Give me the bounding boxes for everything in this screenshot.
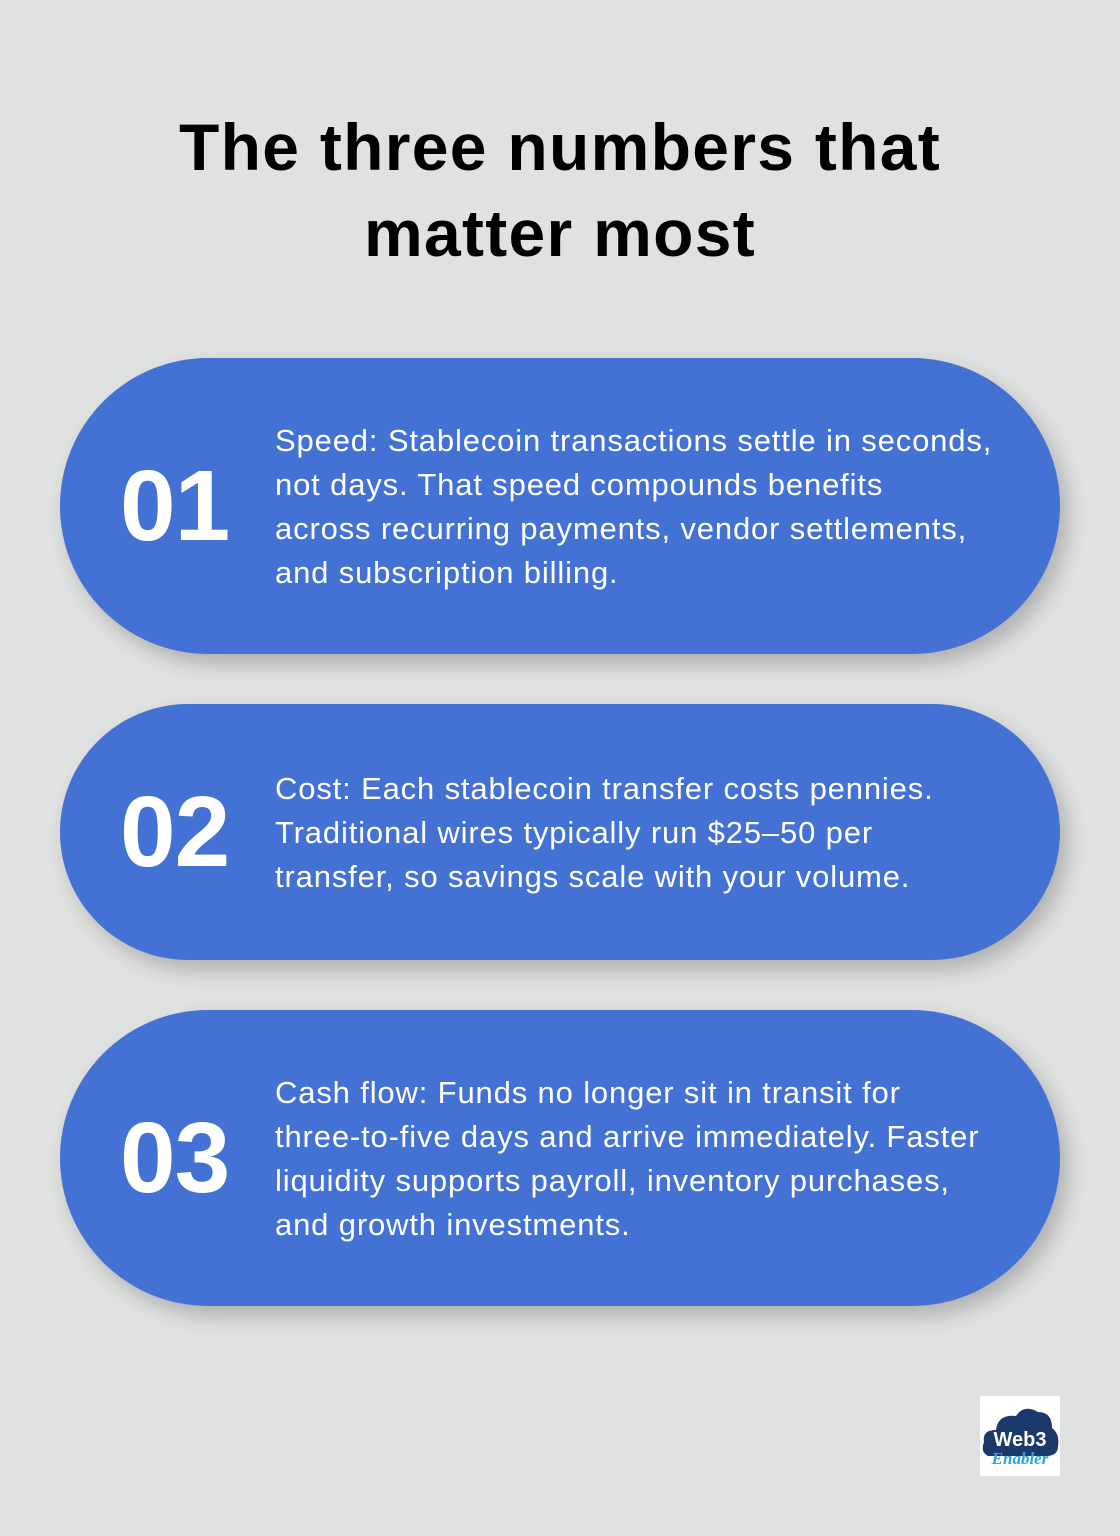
number 01: 01 <box>120 450 229 562</box>
logo: Web3 <box>994 1429 1046 1451</box>
text: cost <box>275 771 934 894</box>
text: cash flow: liquidity supports payroll, inventory purchases, <box>275 1163 950 1198</box>
text: speed: not days. That speed compounds benefits <box>275 467 883 502</box>
logo <box>980 1396 1060 1476</box>
panel: cash flow <box>60 1010 1060 1306</box>
number 02: 02 <box>120 776 229 888</box>
panel: cost <box>60 704 1060 960</box>
text: cost: Traditional wires typically run $25–50 per <box>275 815 873 850</box>
text: cost: transfer, so savings scale with your volume. <box>275 859 910 894</box>
number 03: 03 <box>120 1102 229 1214</box>
text: cash flow: and growth investments. <box>275 1207 631 1242</box>
panel: speed <box>60 358 1060 654</box>
text: speed: Speed: Stablecoin transactions settle in seconds, <box>275 423 992 458</box>
title: The three numbers that <box>179 110 941 184</box>
logo: Enabler <box>991 1449 1049 1468</box>
text: speed: and subscription billing. <box>275 555 618 590</box>
text: cash flow: three-to-five days and arrive immediately. Faster <box>275 1119 979 1154</box>
title: matter most <box>364 196 756 270</box>
text: speed: across recurring payments, vendor settlements, <box>275 511 967 546</box>
text: cash flow: Cash flow: Funds no longer sit in transit for <box>275 1075 901 1110</box>
text: speed <box>275 423 992 590</box>
title <box>179 110 941 270</box>
text: cash flow <box>275 1075 979 1242</box>
text: cost: Cost: Each stablecoin transfer costs pennies. <box>275 771 934 806</box>
